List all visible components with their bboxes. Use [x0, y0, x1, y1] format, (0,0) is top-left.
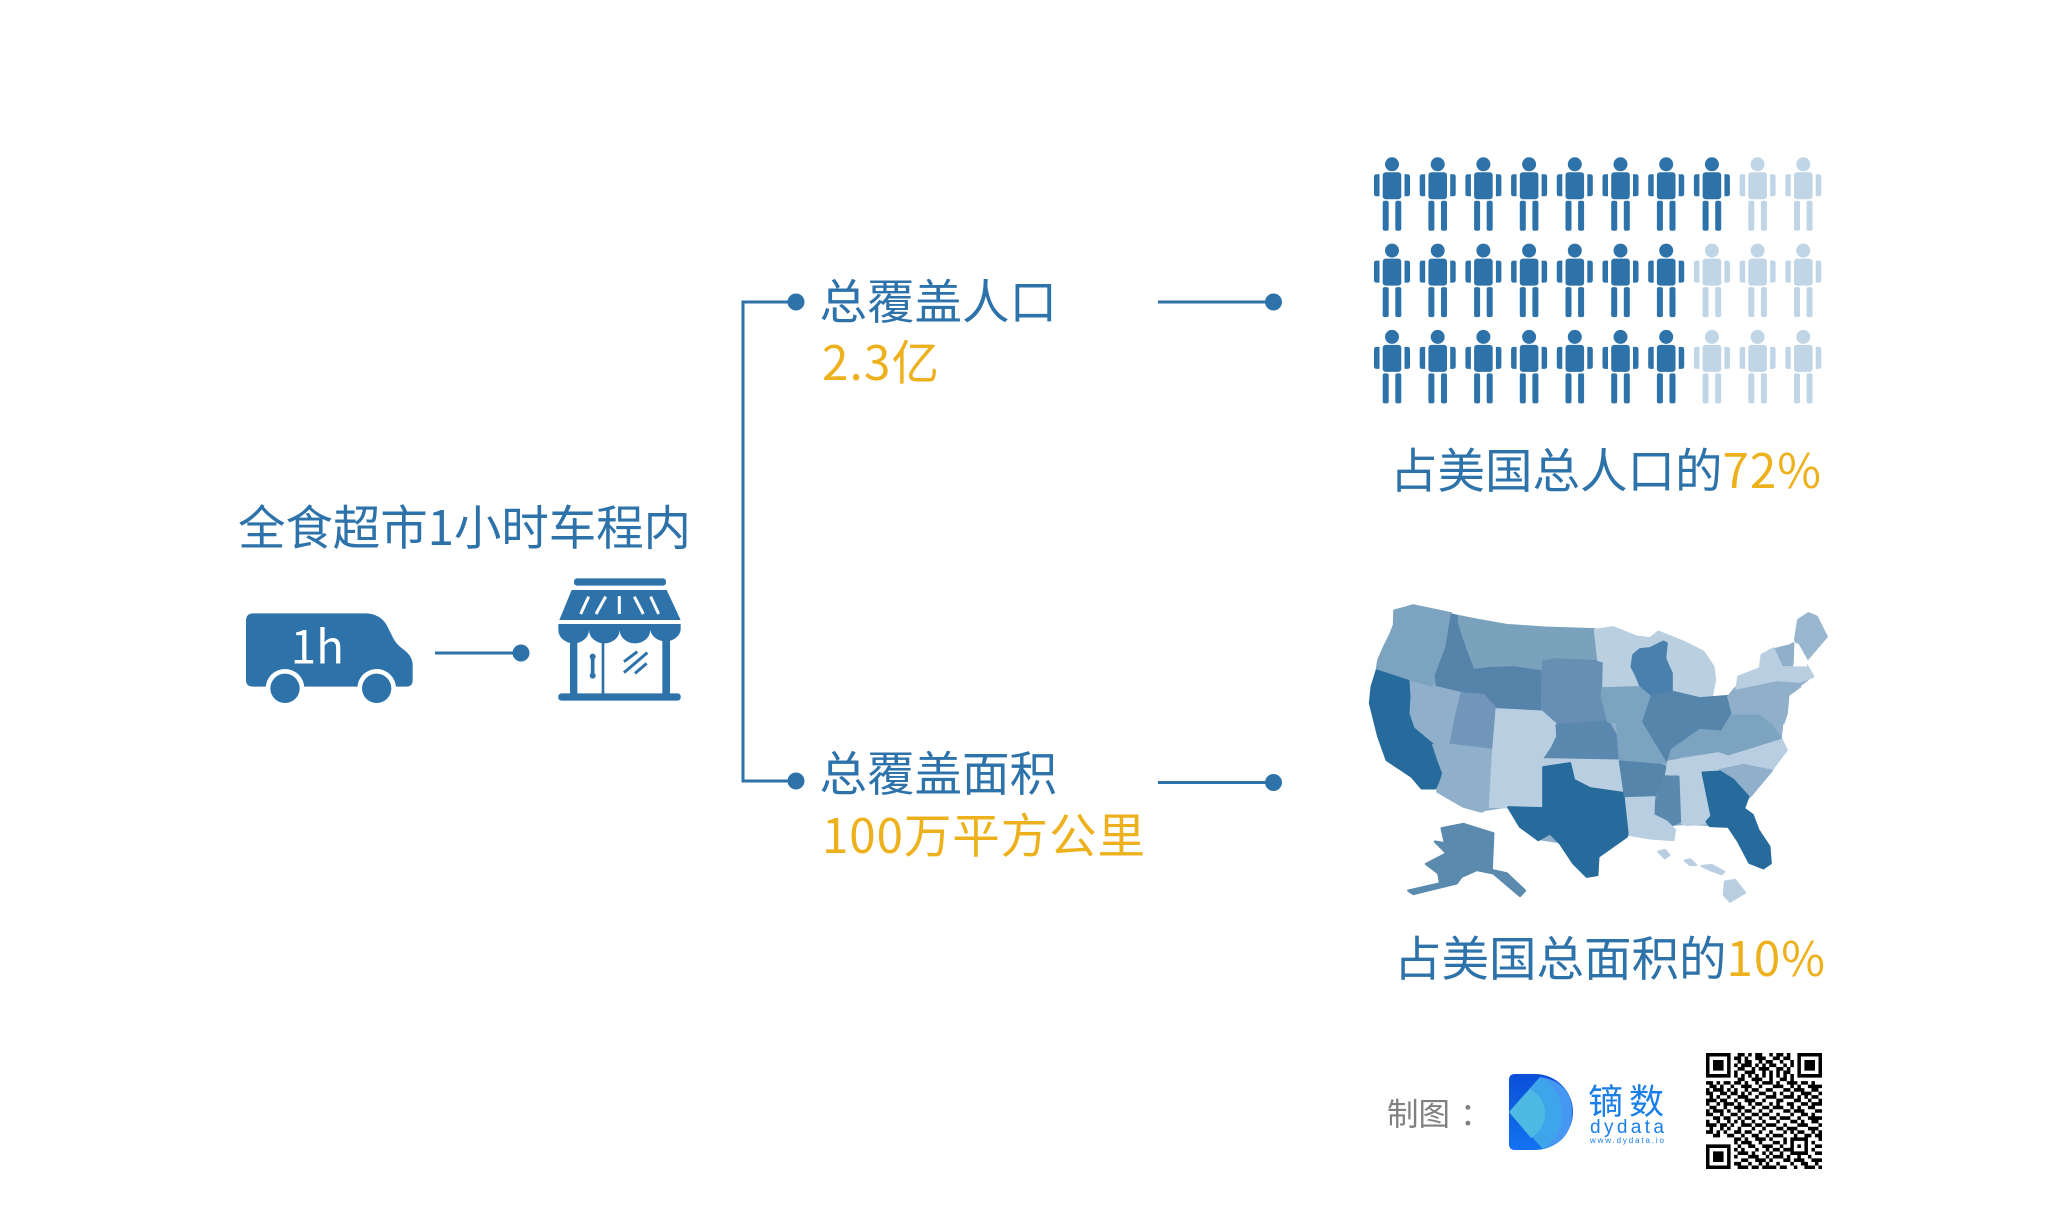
states: southwest and plains [1433, 709, 1629, 877]
caption: share of US population: 占美国总人口的72% [1390, 433, 1822, 502]
credit label: 制图 ： [1387, 1089, 1492, 1135]
states: southeast [1620, 762, 1771, 868]
metric: total area covered: 总覆盖面积 [820, 736, 1057, 805]
bracket connector to the two metrics [743, 294, 804, 790]
connector: area to map [1158, 774, 1282, 791]
states: northwest [1370, 605, 1608, 788]
state: Alaska [1408, 824, 1525, 896]
connector: van to store [435, 644, 530, 662]
logo: dydata mark [1509, 1074, 1573, 1150]
icon: storefront [558, 578, 681, 701]
pictogram: people 72 percent [1374, 157, 1821, 403]
states: east [1667, 613, 1827, 797]
logo: dydata wordmark: 镝数 [1588, 1074, 1670, 1125]
icon: delivery van with 1h: 1h [291, 612, 344, 678]
icon: delivery van with 1h [246, 612, 413, 708]
map: United States choropleth [1370, 605, 1827, 902]
logo: dydata wordmark: dydata [1590, 1117, 1664, 1138]
metric: total population covered [820, 264, 1057, 394]
metric: total area covered [820, 736, 1145, 867]
metric: total population covered: 总覆盖人口 [820, 264, 1057, 333]
caption: share of US area: 占美国总面积的10% [1394, 921, 1826, 990]
logo: dydata wordmark: www.dydata.io [1589, 1136, 1665, 1145]
state: Hawaii [1658, 850, 1745, 902]
QR code [1706, 1055, 1822, 1167]
metric: total population covered: 2.3亿 [822, 325, 939, 394]
metric: total area covered: 100万平方公里 [822, 798, 1145, 867]
states: midwest [1595, 627, 1733, 765]
map underlay silhouette [1370, 605, 1813, 877]
connector: population to pictogram [1158, 294, 1282, 310]
title: within one hour drive: 全食超市1小时车程内 [238, 490, 691, 559]
